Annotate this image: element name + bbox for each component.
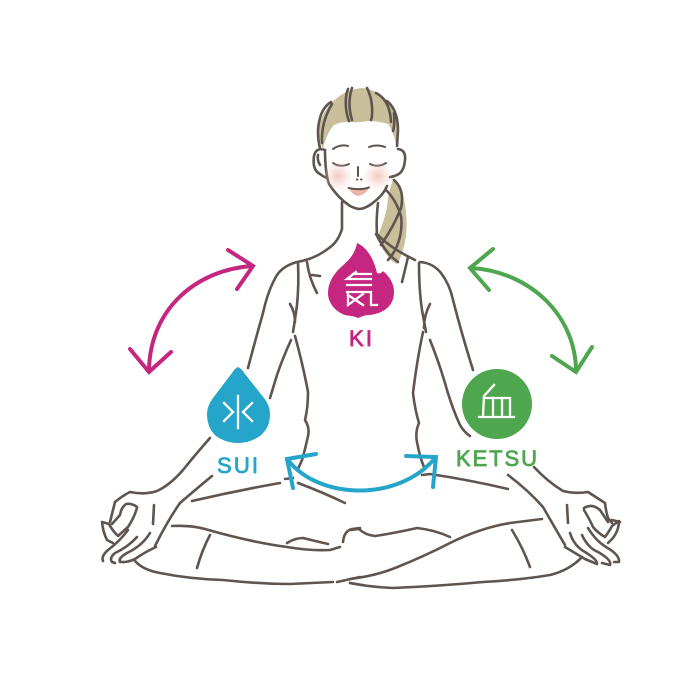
left leg xyxy=(135,478,362,585)
right arm and hand xyxy=(508,467,620,565)
hair strands xyxy=(318,88,398,148)
arrow: KI to SUI xyxy=(130,250,253,372)
arrow: SUI to KETSU xyxy=(287,454,436,491)
label: KETSU: KETSU xyxy=(456,446,537,471)
face xyxy=(314,149,405,209)
arrow: KI to KETSU xyxy=(470,249,592,372)
KI flame badge xyxy=(328,243,394,351)
neck and torso xyxy=(248,202,473,469)
SUI drop badge xyxy=(207,367,270,478)
left arm and hand xyxy=(102,438,212,563)
right leg xyxy=(350,474,582,588)
hair xyxy=(319,88,398,149)
label: SUI: SUI xyxy=(217,453,258,478)
eyebrows and eyes xyxy=(333,145,386,180)
KETSU circle badge xyxy=(456,369,537,471)
cheeks xyxy=(323,161,353,191)
ponytail xyxy=(378,180,407,264)
ponytail lines xyxy=(376,180,402,262)
icon: sui character xyxy=(224,396,252,428)
figure: meditating woman xyxy=(102,88,620,588)
icon: circle xyxy=(462,369,532,439)
icon: ketsu character xyxy=(479,385,514,417)
icon: ki character xyxy=(347,272,377,305)
mouth xyxy=(349,188,369,196)
icon: flame xyxy=(328,243,394,318)
label: KI: KI xyxy=(349,326,372,351)
icon: water drop xyxy=(207,367,270,443)
